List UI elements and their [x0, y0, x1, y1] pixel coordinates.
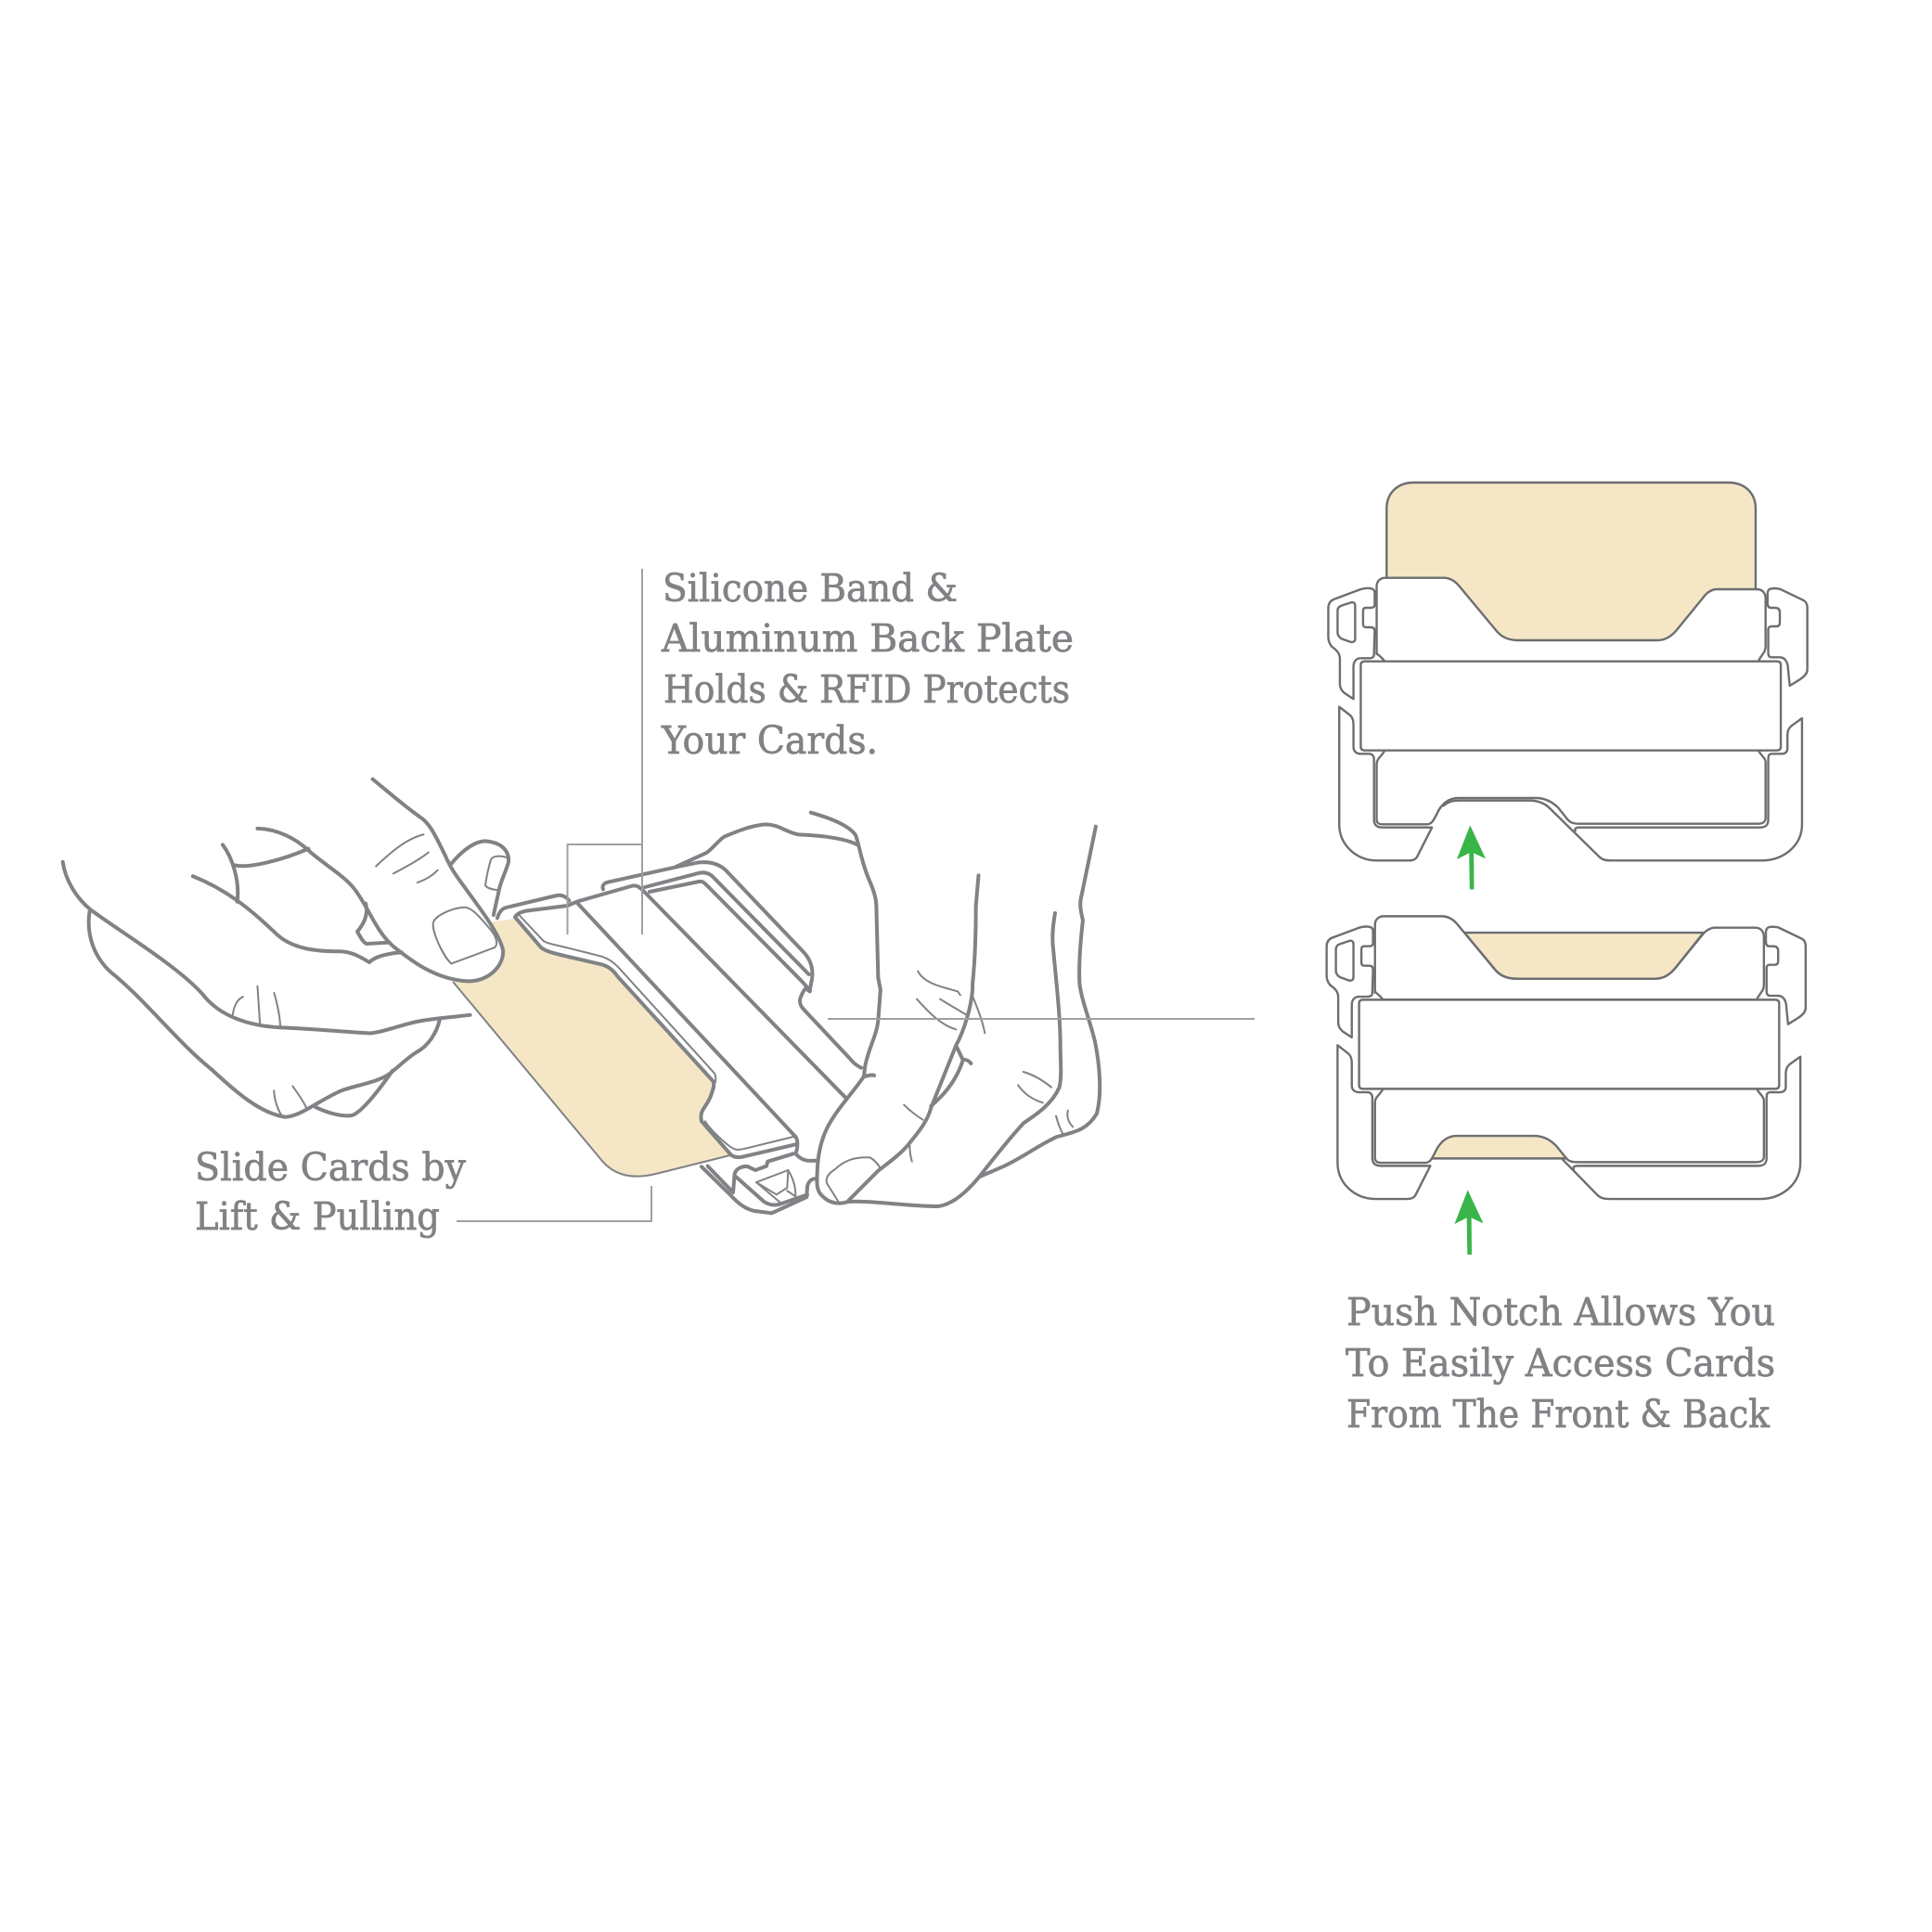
- silicone band: [1359, 999, 1779, 1088]
- frame right: [1563, 1057, 1800, 1199]
- leader lines: silicone band callout: [568, 569, 642, 934]
- wallet end clip detail: [702, 1153, 817, 1213]
- text: push notch callout: Push Notch Allows You: [1346, 1290, 1775, 1334]
- text: silicone band callout: Silicone Band &: [663, 566, 958, 611]
- text: silicone band callout: Your Cards.: [661, 718, 878, 763]
- frame left: [1339, 707, 1432, 860]
- text: push notch callout: To Easily Access Cards: [1346, 1341, 1775, 1385]
- card edge: [1432, 1157, 1566, 1160]
- card visible in bottom notch: [1432, 1136, 1566, 1158]
- raised card: [1386, 483, 1756, 650]
- frame right: [1444, 718, 1802, 860]
- leader line: slide cards callout: [457, 1186, 651, 1221]
- arrow up: [1454, 1190, 1483, 1255]
- lower plate: [1377, 751, 1766, 824]
- thumb fill: [368, 856, 503, 981]
- left clip: [1327, 927, 1373, 1037]
- left slot: [1336, 941, 1354, 981]
- text: slide cards callout: Lift & Pulling: [195, 1194, 440, 1239]
- text: silicone band callout: [661, 566, 1074, 763]
- left clip: [1328, 588, 1374, 699]
- text: push notch callout: From The Front & Back: [1346, 1392, 1771, 1436]
- card being pulled: [454, 919, 730, 1177]
- lower plate: [1375, 1088, 1764, 1163]
- text: silicone band callout: Holds & RFID Protects: [663, 667, 1070, 712]
- top plate outline: [1375, 916, 1764, 999]
- wallet front view: card lowered: [1327, 916, 1806, 1255]
- arrow up: [1457, 825, 1486, 889]
- left hand: [63, 779, 509, 1117]
- right hand: [676, 813, 1100, 1206]
- text: silicone band callout: Aluminum Back Plate: [661, 616, 1074, 661]
- text: push notch callout: [1346, 1290, 1775, 1436]
- left slot: [1337, 602, 1355, 642]
- wallet front view: card raised: [1328, 483, 1808, 889]
- wallet in perspective: [497, 862, 861, 1161]
- text: slide cards callout: Slide Cards by: [195, 1145, 467, 1190]
- card visible in top notch: [1464, 933, 1704, 979]
- right clip: [1768, 588, 1808, 686]
- right clip: [1766, 927, 1806, 1024]
- text: slide cards callout: [195, 1145, 467, 1239]
- leader line: connecting to wallet diagrams: [828, 1018, 1255, 1020]
- illustration: hands pulling card from wallet: [63, 779, 1100, 1213]
- frame left: [1337, 1045, 1430, 1199]
- top plate with notch: [1377, 578, 1766, 662]
- silicone band: [1360, 662, 1781, 751]
